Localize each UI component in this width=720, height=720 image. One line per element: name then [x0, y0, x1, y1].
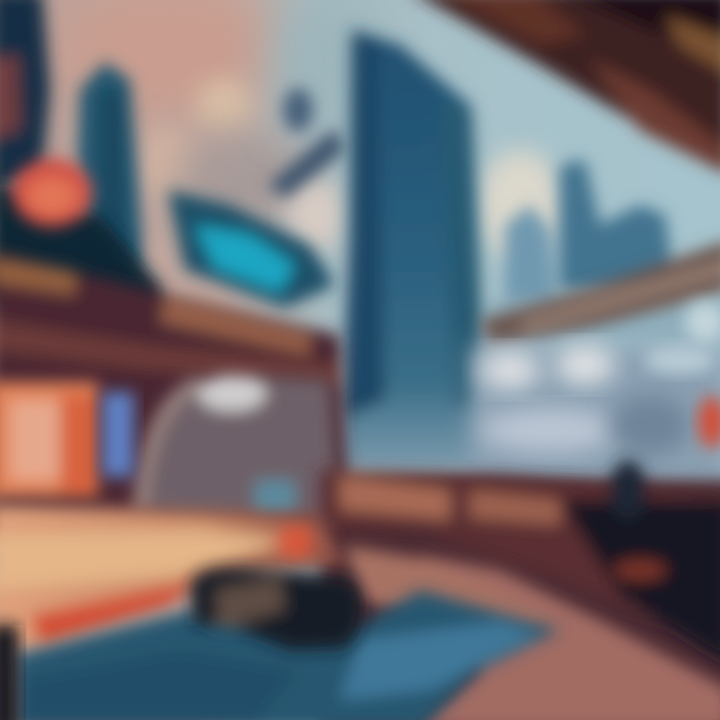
dark brown mid deck left — [0, 250, 350, 540]
blue side panel — [102, 392, 134, 477]
clouds and lower right city — [470, 302, 720, 485]
dark car on floor — [190, 567, 363, 650]
second tower left — [78, 62, 142, 275]
dark foreground post — [0, 625, 18, 720]
roof structure top right — [410, 0, 720, 175]
grey arch interior — [140, 375, 340, 520]
left background mass — [0, 180, 160, 320]
red sign — [12, 159, 92, 227]
lower crowd band right — [320, 460, 720, 665]
elevated walkway right — [480, 240, 720, 350]
blue pool foreground — [15, 590, 560, 720]
teal billboard — [168, 190, 335, 308]
lower dark ground base — [320, 480, 720, 720]
glowing floor — [0, 505, 345, 650]
pink walkway bottom right — [345, 545, 720, 720]
orange glowing screen left — [0, 382, 98, 497]
distant skyline right — [490, 160, 720, 340]
central tall tower — [340, 30, 490, 470]
left dark tower — [0, 0, 50, 190]
small dark flying shape — [268, 88, 345, 198]
